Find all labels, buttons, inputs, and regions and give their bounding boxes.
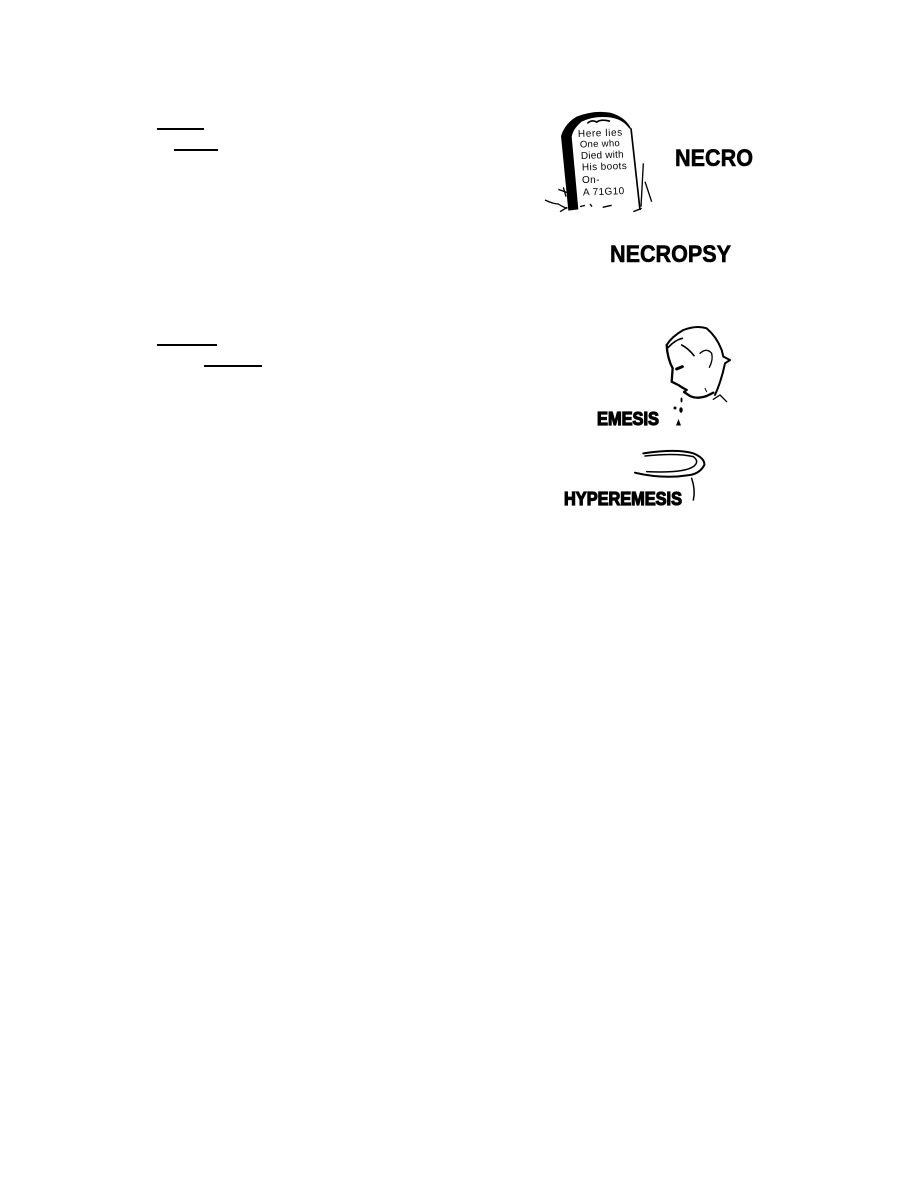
tombstone inscription: One who bbox=[580, 138, 620, 150]
tombstone inscription: Here lies bbox=[578, 127, 623, 140]
label: EMESIS: EMESIS bbox=[597, 409, 659, 429]
underlined term: emesis section bbox=[157, 344, 262, 367]
icon: basin bbox=[635, 451, 704, 500]
tombstone inscription: A 71G10 bbox=[583, 186, 625, 198]
underlined term: necro section bbox=[157, 128, 218, 151]
icon: tombstone bbox=[545, 112, 652, 212]
tombstone inscription bbox=[578, 127, 627, 198]
label: NECROPSY: NECROPSY bbox=[610, 241, 731, 268]
icon: drops of vomit bbox=[674, 398, 683, 426]
label: NECRO: NECRO bbox=[675, 145, 753, 172]
tombstone inscription: On- bbox=[582, 175, 600, 186]
tombstone inscription: His boots bbox=[582, 161, 627, 173]
tombstone inscription: Died with bbox=[581, 150, 624, 162]
icon: head of vomiting boy bbox=[667, 327, 730, 402]
label: HYPEREMESIS: HYPEREMESIS bbox=[564, 489, 682, 509]
